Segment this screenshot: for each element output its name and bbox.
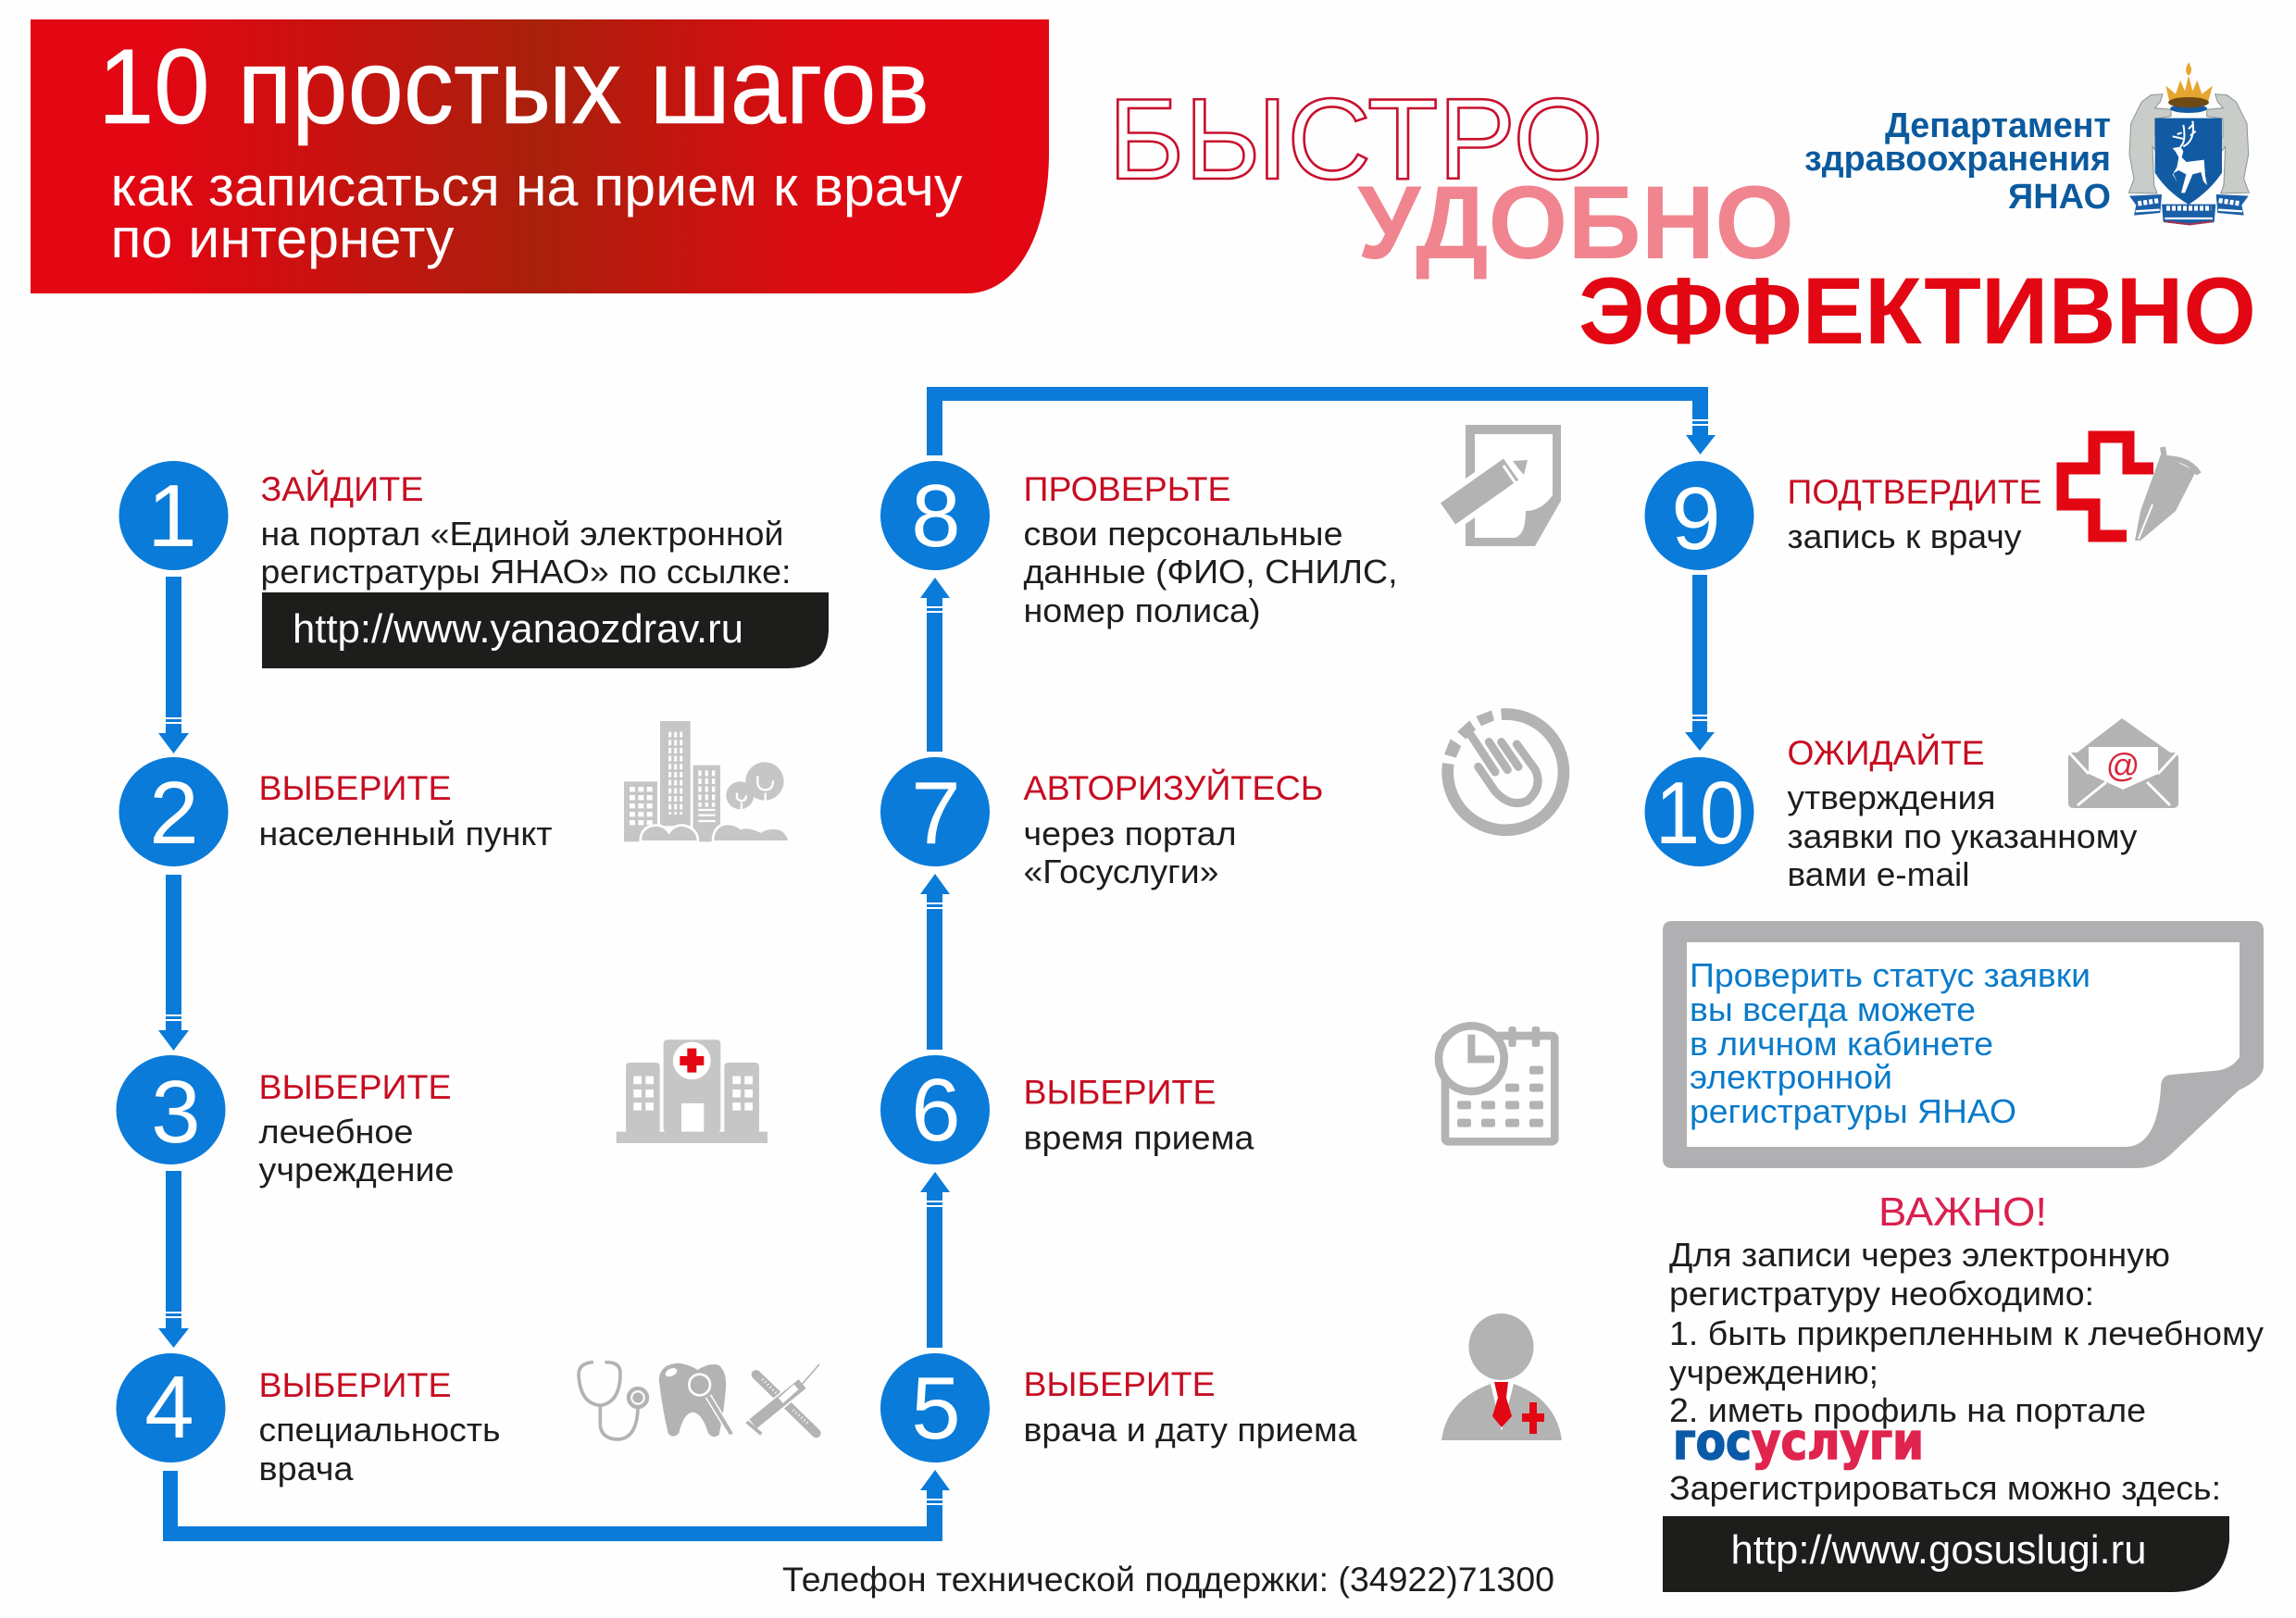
step 8: номер полиса) (1024, 591, 1261, 629)
icon: calendar with clock (1439, 1026, 1554, 1141)
step 4 (117, 1353, 500, 1487)
connector: step 8 to step 9 (927, 387, 1716, 455)
step 6: ВЫБЕРИТЕ (1024, 1074, 1217, 1111)
logo: gosuslugi: услуги (1752, 1413, 1924, 1471)
icon: hospital (617, 1039, 767, 1143)
logo: gosuslugi: гос (1673, 1413, 1752, 1471)
step 7: через портал (1024, 815, 1237, 853)
link bar: yanaozdrav (262, 592, 829, 668)
arrow 9 to 10 (1685, 575, 1715, 751)
link bar: yanaozdrav: http://www.yanaozdrav.ru (293, 606, 743, 652)
step 9 (1644, 461, 2042, 570)
step 3 (117, 1055, 454, 1189)
step 5: ВЫБЕРИТЕ (1024, 1365, 1215, 1403)
logo: gosuslugi (1673, 1413, 1924, 1471)
step 2: населенный пункт (259, 815, 552, 853)
icon: coat of arms (2128, 62, 2249, 225)
step 3: лечебное (259, 1113, 413, 1151)
panel: important: 2. иметь профиль на портале (1669, 1391, 2146, 1429)
step 1: ЗАЙДИТЕ (261, 469, 424, 508)
step 3: учреждение (259, 1151, 454, 1189)
step 10 (1644, 733, 2137, 893)
step 4: 4 (144, 1358, 194, 1457)
arrow 3 to 4 (158, 1171, 189, 1348)
icon: red cross with pen (2063, 437, 2199, 541)
arrow 1 to 2 (158, 577, 189, 753)
step 9: 9 (1671, 469, 1721, 568)
icon: envelope: @ (2106, 746, 2140, 784)
header banner (31, 19, 1049, 293)
step 1 (119, 461, 829, 668)
step 10: 10 (1655, 764, 1744, 863)
panel: check application status: электронной (1690, 1058, 1892, 1096)
department name (1804, 106, 2111, 217)
icon: medical specialities (579, 1363, 819, 1439)
slogan: fast, convenient, effective (1108, 76, 2256, 364)
step 10: утверждения (1787, 778, 1996, 816)
department name: здравоохранения (1804, 140, 2111, 179)
step 6: 6 (911, 1061, 961, 1160)
slogan: fast, convenient, effective: УДОБНО (1357, 165, 1794, 280)
panel: check application status: регистратуры ЯНАО (1690, 1092, 2016, 1130)
step 7: АВТОРИЗУЙТЕСЬ (1024, 768, 1324, 807)
arrow 5 to 6 (920, 1172, 950, 1348)
subtitle: по интернету (111, 207, 455, 269)
step 1: 1 (147, 467, 197, 566)
subtitle: как записаться на прием к врачу (111, 156, 963, 218)
step 8: ПРОВЕРЬТЕ (1024, 470, 1231, 508)
step 2 (119, 757, 552, 866)
step 6 (880, 1055, 1255, 1164)
title: 10 простых шагов (98, 28, 930, 146)
slogan: fast, convenient, effective: БЫСТРО (1108, 76, 1603, 204)
slogan: fast, convenient, effective: ЭФФЕКТИВНО (1578, 258, 2256, 364)
step 3: 3 (151, 1063, 201, 1162)
connector: step 4 to step 5 (163, 1470, 950, 1541)
department name: Департамент (1885, 106, 2111, 145)
step 8: свои персональные (1024, 515, 1342, 553)
panel: important (1663, 1189, 2264, 1592)
step 4: специальность (259, 1411, 500, 1449)
panel: important: ВАЖНО! (1878, 1189, 2047, 1235)
icon: city (624, 721, 790, 841)
panel: important: учреждению; (1669, 1353, 1878, 1391)
link bar: gosuslugi: http://www.gosuslugi.ru (1731, 1527, 2146, 1573)
icon: envelope (2068, 718, 2178, 808)
step 5: врача и дату приема (1024, 1411, 1358, 1449)
icon: hand touch (1444, 710, 1564, 830)
panel: important: Зарегистрироваться можно здесь: (1669, 1469, 2221, 1507)
panel: check application status (1663, 921, 2264, 1168)
panel: check application status: Проверить статус заявки (1690, 956, 2090, 994)
icon: document with pencil (1448, 425, 1561, 546)
step 6: время приема (1024, 1118, 1255, 1157)
support phone: Телефон технической поддержки: (34922)71300 (782, 1561, 1554, 1599)
step 5: 5 (911, 1359, 961, 1458)
panel: important: 1. быть прикрепленным к лечебному (1669, 1314, 2264, 1352)
step 8: 8 (911, 467, 961, 566)
step 3: ВЫБЕРИТЕ (259, 1068, 452, 1106)
step 7: 7 (911, 764, 961, 863)
panel: check application status: вы всегда можете (1690, 990, 1976, 1028)
icon: doctor (1441, 1313, 1562, 1440)
step 2: 2 (149, 764, 199, 863)
step 1: на портал «Единой электронной (261, 515, 783, 553)
panel: check application status: в личном кабинете (1690, 1025, 1993, 1063)
step 8: данные (ФИО, СНИЛС, (1024, 553, 1398, 591)
arrow 2 to 3 (158, 875, 189, 1051)
step 1: регистратуры ЯНАО» по ссылке: (261, 553, 791, 591)
panel: important: Для записи через электронную (1669, 1236, 2170, 1274)
step 10: вами e-mail (1787, 855, 1970, 893)
step 7: «Госуслуги» (1024, 853, 1218, 890)
step 4: ВЫБЕРИТЕ (259, 1366, 452, 1404)
step 4: врача (259, 1450, 355, 1487)
step 2: ВЫБЕРИТЕ (259, 769, 452, 807)
arrow 7 to 8 (920, 578, 950, 752)
step 10: ОЖИДАЙТЕ (1787, 733, 1985, 772)
subtitle (111, 156, 963, 269)
step 10: заявки по указанному (1787, 817, 2137, 855)
step 7 (880, 757, 1324, 890)
arrow 6 to 7 (920, 874, 950, 1050)
step 8 (880, 461, 1398, 629)
step 9: запись к врачу (1787, 517, 2022, 555)
step 9: ПОДТВЕРДИТЕ (1787, 473, 2042, 511)
step 5 (880, 1353, 1358, 1462)
panel: important: регистратуру необходимо: (1669, 1275, 2094, 1313)
department name: ЯНАО (2008, 178, 2111, 217)
link bar: gosuslugi (1663, 1516, 2229, 1592)
